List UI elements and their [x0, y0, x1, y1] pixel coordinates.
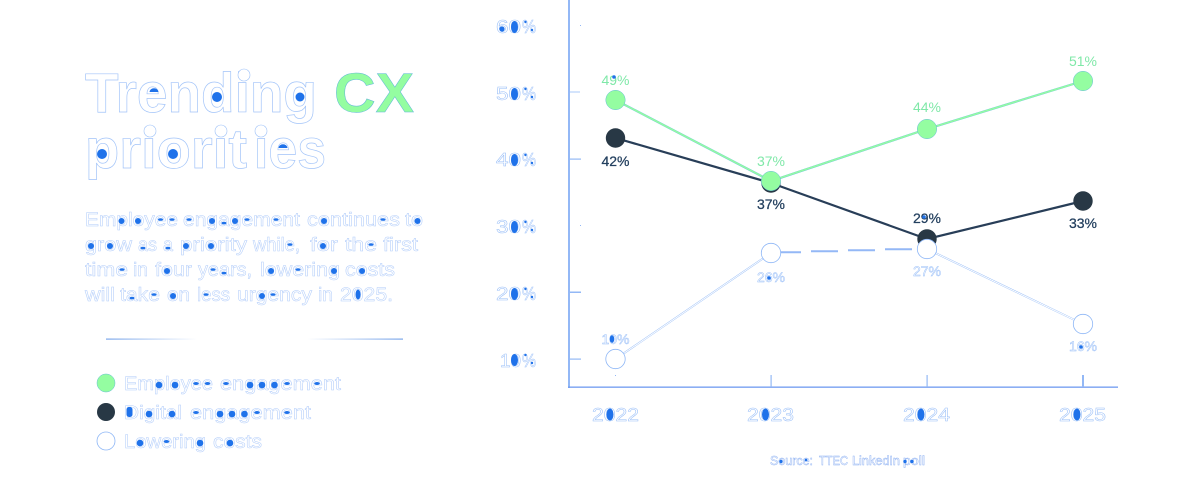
intro text block: while,	[252, 235, 300, 256]
data labels: employee engagement	[601, 53, 1097, 169]
legend: employee engagement: engagement	[220, 374, 342, 395]
intro text block: to	[405, 210, 423, 231]
data labels: employee engagement: 44%	[913, 99, 941, 115]
intro text block: the	[345, 235, 377, 256]
source note: LinkedIn	[852, 454, 900, 468]
source note	[770, 454, 925, 468]
legend: lowering costs: Lowering	[124, 432, 206, 453]
title: CX	[334, 61, 414, 124]
x axis labels: 2025	[1059, 405, 1106, 425]
y axis labels: 50	[496, 84, 521, 104]
intro text block: in	[318, 285, 333, 306]
y axis labels: %	[522, 351, 536, 371]
data labels: digital engagement: 37%	[757, 196, 785, 212]
data labels: lowering costs	[601, 263, 1097, 354]
data labels: lowering costs: 16%	[1069, 338, 1097, 354]
data labels: lowering costs: 10%	[601, 331, 630, 347]
y axis labels: %	[522, 17, 536, 37]
intro text block: time	[85, 260, 128, 281]
y axis labels: %	[522, 217, 536, 237]
legend: digital engagement	[97, 403, 312, 424]
intro text block: continues	[307, 210, 400, 231]
data labels: digital engagement: 42%	[601, 153, 630, 169]
source note: TTEC	[819, 454, 848, 468]
intro text block: grow	[85, 235, 132, 256]
data labels: employee engagement: 49%	[601, 72, 630, 88]
y axis labels: %	[522, 150, 536, 170]
legend: employee engagement	[97, 374, 342, 395]
intro text block: take	[120, 285, 160, 306]
intro text block: in	[133, 260, 148, 281]
legend: digital engagement: engagement	[190, 403, 312, 424]
title	[85, 61, 414, 180]
intro text block: will	[84, 285, 115, 306]
y axis labels: 30	[496, 217, 521, 237]
intro text block: four	[155, 260, 193, 281]
data labels: employee engagement: 37%	[757, 153, 785, 169]
intro text block: engagement	[183, 210, 301, 231]
data labels: digital engagement: 33%	[1069, 215, 1097, 231]
x axis labels: 2022	[592, 405, 639, 425]
intro text block: 2025.	[340, 285, 393, 306]
legend: lowering costs	[97, 432, 262, 453]
x axis labels: 2023	[747, 405, 794, 425]
intro text block: as	[138, 235, 157, 256]
y axis labels: 40	[496, 150, 521, 170]
y axis labels: 60	[496, 17, 521, 37]
intro text block: lowering	[260, 260, 340, 281]
legend	[97, 374, 342, 453]
legend: digital engagement: Digital	[124, 403, 182, 424]
data labels: digital engagement: 29%	[913, 210, 941, 226]
line: employee engagement	[606, 71, 1093, 191]
intro text block: Employee	[85, 210, 178, 231]
legend: employee engagement: Employee	[124, 374, 213, 395]
title: ies	[254, 117, 326, 180]
data labels: lowering costs: 27%	[913, 263, 941, 279]
x axis	[568, 375, 1118, 388]
intro text block	[84, 210, 423, 306]
y axis labels: %	[522, 284, 536, 304]
intro text block: urgency	[237, 285, 313, 306]
y axis	[568, 0, 581, 388]
intro text block: priority	[180, 235, 248, 256]
x axis labels: 2024	[903, 405, 950, 425]
intro text block: for	[310, 235, 339, 256]
intro text block: years,	[198, 260, 252, 281]
line: digital engagement	[606, 128, 1093, 249]
data labels: employee engagement: 51%	[1069, 53, 1097, 69]
data labels: digital engagement	[601, 153, 1097, 231]
intro text block: less	[197, 285, 230, 306]
title: priorit	[85, 117, 247, 180]
title: Trending	[85, 61, 317, 124]
legend: lowering costs: costs	[213, 432, 262, 453]
y axis labels: 20	[496, 284, 521, 304]
y axis labels: %	[522, 84, 536, 104]
divider	[106, 338, 403, 340]
line: lowering costs	[606, 239, 1093, 369]
data labels: lowering costs: 26%	[757, 269, 785, 285]
intro text block: first	[383, 235, 419, 256]
y axis labels: 10	[500, 351, 521, 371]
intro text block: a	[163, 235, 173, 256]
source note: poll	[903, 454, 925, 468]
y axis labels	[496, 17, 536, 371]
x axis labels	[592, 405, 1106, 425]
source note: Source:	[770, 454, 813, 468]
intro text block: costs	[345, 260, 395, 281]
intro text block: on	[167, 285, 190, 306]
